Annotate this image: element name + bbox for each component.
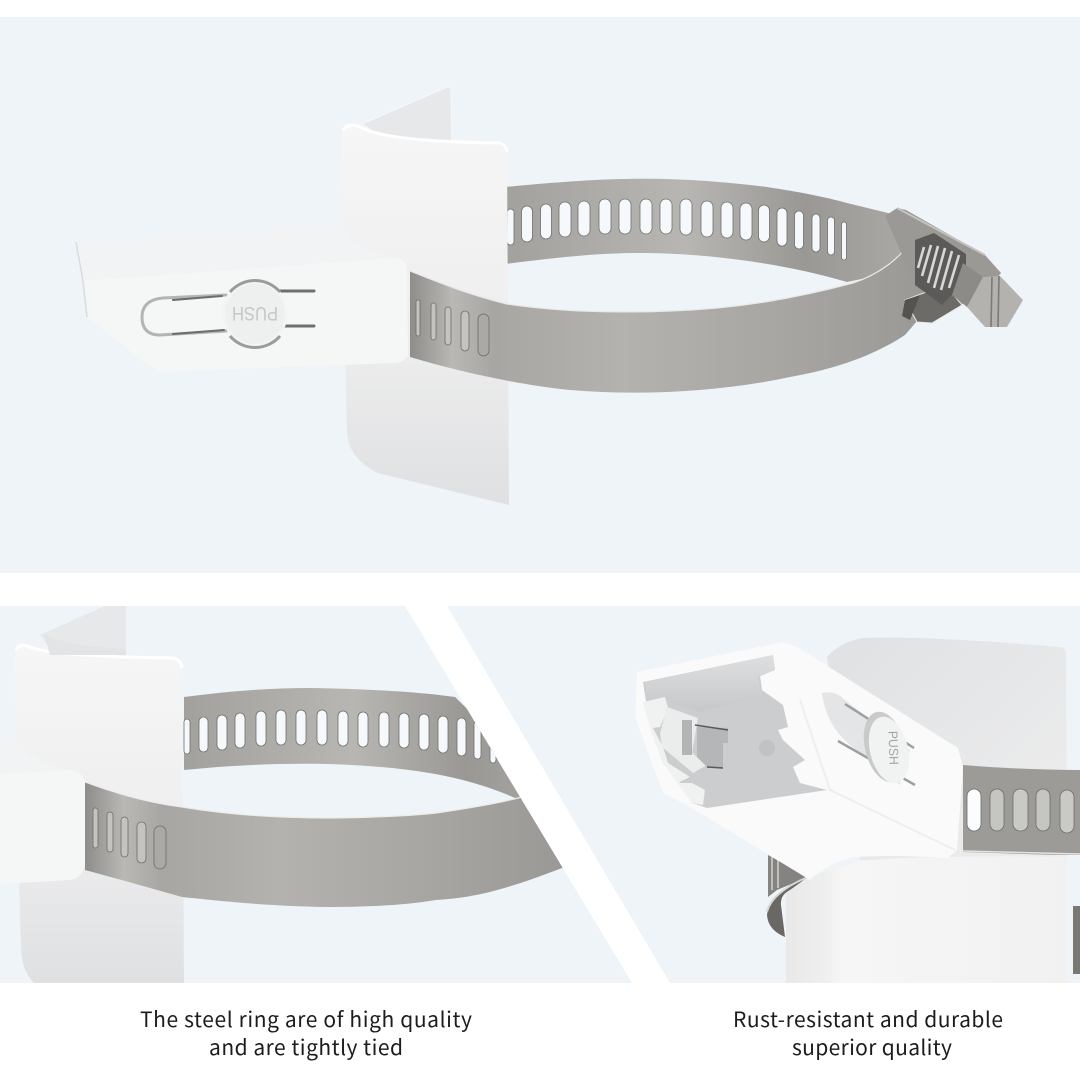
- push-button slot: [142, 291, 314, 335]
- caption: steel ring: and are tightly tied: [209, 1032, 403, 1062]
- latch clip: [660, 707, 707, 773]
- panel: steel ring close-up: [0, 606, 632, 983]
- slots in front of ring: [93, 808, 166, 869]
- steel ring: front section: [410, 240, 935, 393]
- panel: rust-resistant close-up: [447, 606, 1080, 983]
- lower-right band fragment: [1073, 906, 1080, 974]
- slots in back of ring: [507, 199, 846, 260]
- steel ring: [963, 765, 1080, 855]
- caption: steel ring: The steel ring are of high quality: [140, 1004, 472, 1034]
- screw hole: [759, 740, 775, 756]
- mounting arm: [0, 733, 69, 774]
- curled band behind plate: [767, 855, 808, 937]
- push slot: [822, 692, 915, 785]
- angled mounting arm: [635, 642, 963, 880]
- caption: rust resistant: superior quality: [792, 1032, 952, 1062]
- slots in front of ring: [416, 300, 489, 356]
- push button: [222, 280, 288, 347]
- screw thread: [918, 245, 959, 290]
- caption: steel ring: [140, 1004, 472, 1062]
- recessed underside: [643, 655, 827, 808]
- rear bracket plate: [827, 638, 1067, 860]
- back of ring: [184, 688, 522, 800]
- rear fin: [40, 606, 126, 660]
- push button: [864, 712, 909, 783]
- push button: PUSH: [232, 302, 278, 323]
- horizontal mounting arm: [76, 223, 408, 372]
- rear fin of bracket: [362, 87, 452, 150]
- steel ring: back section: [505, 179, 905, 282]
- bracket plate: [15, 643, 184, 983]
- caption: rust resistant: [733, 1004, 1003, 1062]
- slots in ring: [967, 789, 1074, 833]
- front of ring: [85, 782, 570, 907]
- hex bolt head: [967, 276, 1023, 327]
- arm bevel edge: [800, 700, 955, 850]
- bracket vertical plate: [342, 123, 509, 505]
- caption: rust resistant: Rust-resistant and durable: [733, 1004, 1003, 1034]
- lower bracket plate: [786, 857, 973, 983]
- panel: main product view: [0, 17, 1080, 573]
- push button: PUSH: [885, 731, 902, 765]
- bolt shaft: [952, 263, 983, 307]
- slots in back of ring: [184, 710, 496, 763]
- screw housing assembly: [885, 208, 1023, 327]
